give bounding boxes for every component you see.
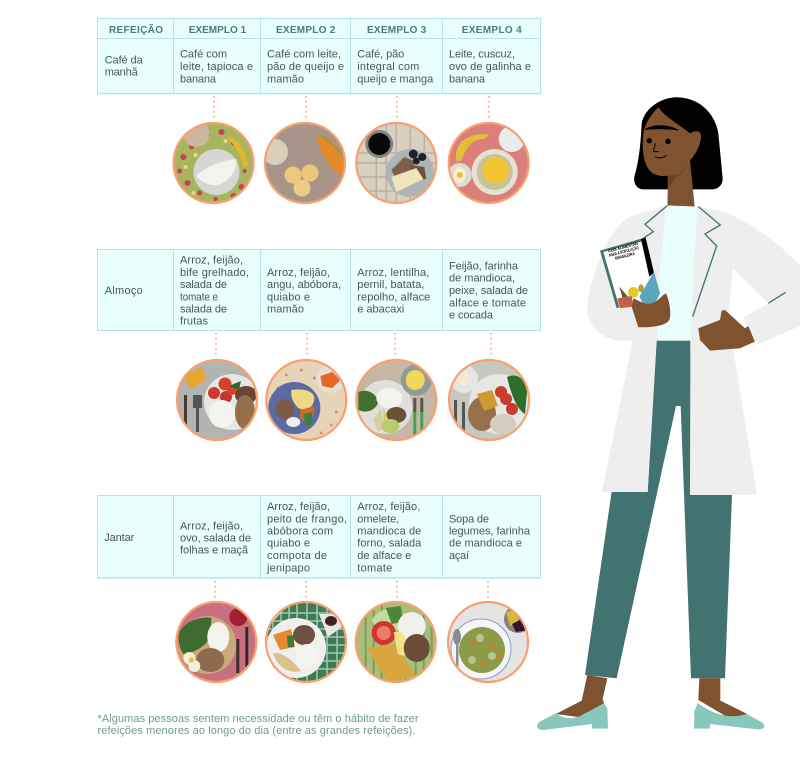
jantar exemplo 4: de mandioca e xyxy=(449,538,522,550)
jantar exemplo 1: Arroz, feijão, xyxy=(180,520,243,532)
café da manhã exemplo 3: queijo e manga xyxy=(357,73,434,85)
column headers xyxy=(109,23,522,36)
jantar exemplo 1: folhas e maçã xyxy=(180,545,249,557)
table: almoço xyxy=(98,249,540,330)
almoço exemplo 3: Arroz, lentilha, xyxy=(357,267,429,279)
jantar exemplo 4: Sopa de xyxy=(449,513,489,525)
table: café da manhã xyxy=(97,18,541,94)
photo: arroz, feijão, frango, abóbora e compota xyxy=(265,601,347,683)
connectors: jantar xyxy=(215,581,488,601)
photo: café com leite, pão de queijo e mamão xyxy=(262,122,346,204)
table: jantar xyxy=(97,495,541,578)
row label: café da manhã: manhã xyxy=(105,67,139,79)
photo: café, pão integral com queijo e manga xyxy=(355,122,437,204)
lapels xyxy=(643,206,786,317)
jantar exemplo 2: abóbora com xyxy=(267,525,333,537)
jantar exemplo 2: compota de xyxy=(267,550,327,562)
photo: arroz, feijão, bife, salada de tomate e frutas xyxy=(176,359,260,441)
photo: feijão, farinha, peixe, salada e cocada xyxy=(448,359,530,441)
photo: arroz, feijão, angu, abóbora, quiabo e mamão xyxy=(265,359,347,441)
almoço exemplo 1: salada de xyxy=(180,303,227,315)
column headers: EXEMPLO 2 xyxy=(276,25,336,36)
neck xyxy=(667,160,695,207)
jantar exemplo 1: ovo, salada de xyxy=(180,532,251,544)
café da manhã exemplo 4 xyxy=(449,49,531,85)
photo: arroz, feijão, ovo, salada de folhas e maçã xyxy=(175,601,257,683)
café da manhã exemplo 3: Café, pão xyxy=(357,49,404,61)
jantar exemplo 2: jenipapo xyxy=(266,562,310,574)
almoço exemplo 1: salada de xyxy=(180,279,227,291)
shirt xyxy=(657,207,697,341)
jantar exemplo 3: de alface e xyxy=(357,550,411,562)
jantar exemplo 4: legumes, farinha xyxy=(449,525,531,537)
café da manhã exemplo 1: leite, tapioca e xyxy=(180,61,253,73)
almoço exemplo 3 xyxy=(357,267,430,315)
almoço exemplo 1: bife grelhado, xyxy=(180,267,249,279)
café da manhã exemplo 3: integral com xyxy=(357,61,419,73)
café da manhã exemplo 2: Café com leite, xyxy=(267,49,341,61)
row label: almoço: Almoço xyxy=(105,285,143,297)
book xyxy=(600,238,660,308)
jantar exemplo 2: peito de frango, xyxy=(267,513,347,525)
jantar exemplo 3: tomate xyxy=(357,562,392,574)
almoço exemplo 4 xyxy=(449,260,528,322)
footnote xyxy=(98,713,419,737)
jantar exemplo 3: forno, salada xyxy=(357,538,422,550)
almoço exemplo 4: alface e tomate xyxy=(449,297,526,309)
trousers xyxy=(585,340,732,678)
jantar exemplo 2: quiabo e xyxy=(267,538,310,550)
café da manhã exemplo 1: banana xyxy=(180,73,217,85)
jantar exemplo 3: omelete, xyxy=(357,513,399,525)
column headers: EXEMPLO 3 xyxy=(367,25,427,36)
almoço exemplo 4: e cocada xyxy=(449,310,494,322)
book: PARA A POPULAÇÃO xyxy=(608,245,640,258)
almoço exemplo 2: quiabo e xyxy=(267,291,310,303)
café da manhã exemplo 3 xyxy=(357,49,434,85)
café da manhã exemplo 1 xyxy=(180,49,253,85)
almoço exemplo 2 xyxy=(267,267,341,315)
café da manhã exemplo 1: Café com xyxy=(180,49,227,61)
jantar exemplo 3: mandioca de xyxy=(357,525,421,537)
jantar exemplo 3: Arroz, feijão, xyxy=(357,501,420,513)
right hand xyxy=(698,310,755,351)
photo: arroz, lentilha, pernil, batata, repolho, alface e abacaxi xyxy=(355,359,437,441)
jantar exemplo 2 xyxy=(266,501,347,574)
hair xyxy=(634,97,723,189)
connectors: almoço xyxy=(216,333,491,358)
café da manhã exemplo 2: pão de queijo e xyxy=(267,61,344,73)
jantar exemplo 4: açaí xyxy=(449,550,469,562)
photo: sopa de legumes, farinha de mandioca e açaí xyxy=(447,601,532,683)
photo: leite, cuscuz, ovo de galinha e banana xyxy=(448,122,530,204)
jantar exemplo 1 xyxy=(180,520,251,557)
book: GUIA ALIMENTAR xyxy=(607,241,639,254)
column headers: REFEIÇÃO xyxy=(109,23,163,36)
almoço exemplo 3: repolho, alface xyxy=(357,291,430,303)
café da manhã exemplo 4: Leite, cuscuz, xyxy=(449,49,515,61)
almoço exemplo 2: angu, abóbora, xyxy=(267,279,341,291)
lab coat xyxy=(587,205,800,495)
almoço exemplo 1 xyxy=(180,255,249,328)
jantar exemplo 2: Arroz, feijão, xyxy=(267,501,330,513)
jantar exemplo 3 xyxy=(357,501,422,574)
café da manhã exemplo 4: banana xyxy=(449,73,486,85)
café da manhã exemplo 4: ovo de galinha e xyxy=(449,61,531,73)
almoço exemplo 4: de mandioca, xyxy=(449,273,515,285)
book: BRASILEIRA xyxy=(615,251,636,261)
illustration: doctor / nutritionist xyxy=(537,97,800,730)
left foot and shoe xyxy=(537,675,608,730)
row label: café da manhã xyxy=(105,54,144,79)
almoço exemplo 2: Arroz, feijão, xyxy=(267,267,330,279)
row label: café da manhã: Café da xyxy=(105,54,144,66)
footnote: *Algumas pessoas sentem necessidade ou têm o hábito de fazer xyxy=(98,713,419,725)
right foot and shoe xyxy=(694,678,764,729)
jantar exemplo 4 xyxy=(449,513,531,562)
almoço exemplo 1: tomate e xyxy=(180,291,218,303)
café da manhã exemplo 2: mamão xyxy=(267,73,304,85)
almoço exemplo 4: Feijão, farinha xyxy=(449,260,519,272)
connectors: café da manhã xyxy=(214,96,489,120)
face xyxy=(643,107,701,176)
almoço exemplo 1: frutas xyxy=(180,316,208,328)
almoço exemplo 4: peixe, salada de xyxy=(449,285,528,297)
photo: arroz, feijão, omelete, mandioca, alface e tomate xyxy=(355,601,437,683)
café da manhã exemplo 2 xyxy=(267,49,344,85)
almoço exemplo 1: Arroz, feijão, xyxy=(180,255,243,267)
almoço exemplo 3: pernil, batata, xyxy=(357,279,424,291)
column headers: EXEMPLO 1 xyxy=(189,25,247,36)
photo: café com leite, tapioca e banana xyxy=(172,121,254,204)
almoço exemplo 3: e abacaxi xyxy=(357,303,404,315)
column headers: EXEMPLO 4 xyxy=(462,25,522,36)
left hand xyxy=(632,293,670,327)
almoço exemplo 2: mamão xyxy=(267,303,304,315)
row label: jantar: Jantar xyxy=(104,532,135,544)
footnote: refeições menores ao longo do dia (entre as grandes refeições). xyxy=(98,725,416,737)
